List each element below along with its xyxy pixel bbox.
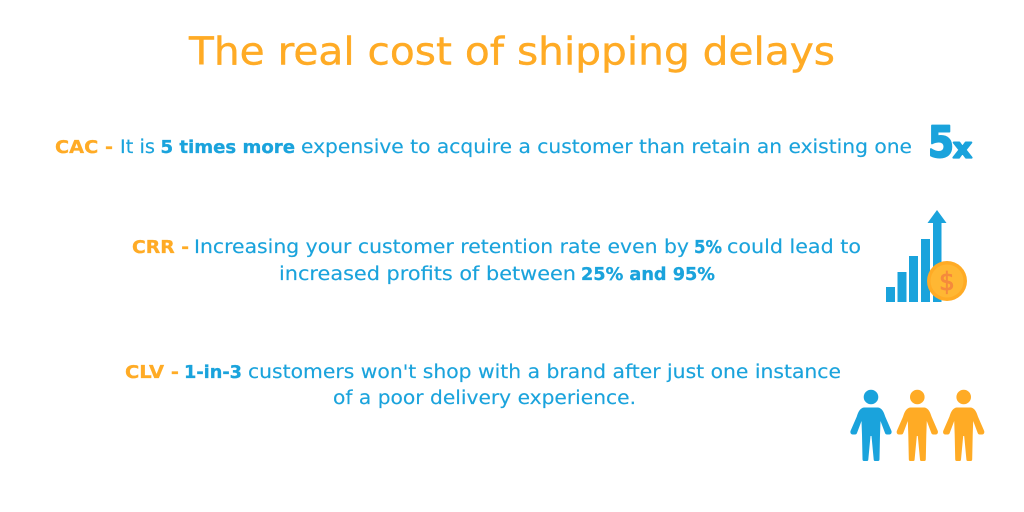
icon: three people — [850, 390, 984, 461]
icon: growth chart with coin — [886, 210, 967, 302]
text block: CRR: 5% — [694, 237, 722, 258]
text block: CLV — [125, 362, 841, 409]
icon: 5x — [928, 118, 972, 168]
icon: 5x: x — [953, 132, 972, 164]
text block: CAC: CAC - — [55, 137, 113, 158]
icon: growth chart with coin: $ — [939, 267, 955, 296]
text block: CRR: 25% and 95% — [581, 264, 715, 285]
text block: CAC: expensive to acquire a customer than retain an existing one — [301, 137, 912, 158]
text block: CRR: could lead to — [727, 237, 861, 258]
text block: CLV: of a poor delivery experience. — [333, 388, 636, 409]
text block: CRR — [132, 237, 861, 285]
person: blue — [850, 390, 892, 461]
text block: CRR: CRR - — [132, 237, 189, 258]
text block: CRR: Increasing your customer retention rate even by — [194, 237, 689, 258]
text block: CLV: customers won't shop with a brand after just one instance — [248, 362, 841, 383]
person: orange — [897, 390, 938, 461]
text block: CAC: It is — [120, 137, 155, 158]
text block: CRR: increased profits of between — [279, 264, 576, 285]
text block: CLV: CLV - — [125, 362, 179, 383]
person: orange — [943, 390, 984, 461]
title: The real cost of shipping delays — [188, 30, 835, 74]
text block: CAC — [55, 137, 912, 158]
text block: CLV: 1-in-3 — [184, 362, 242, 383]
text block: CAC: 5 times more — [160, 137, 295, 158]
icon: 5x: 5 — [928, 118, 954, 168]
